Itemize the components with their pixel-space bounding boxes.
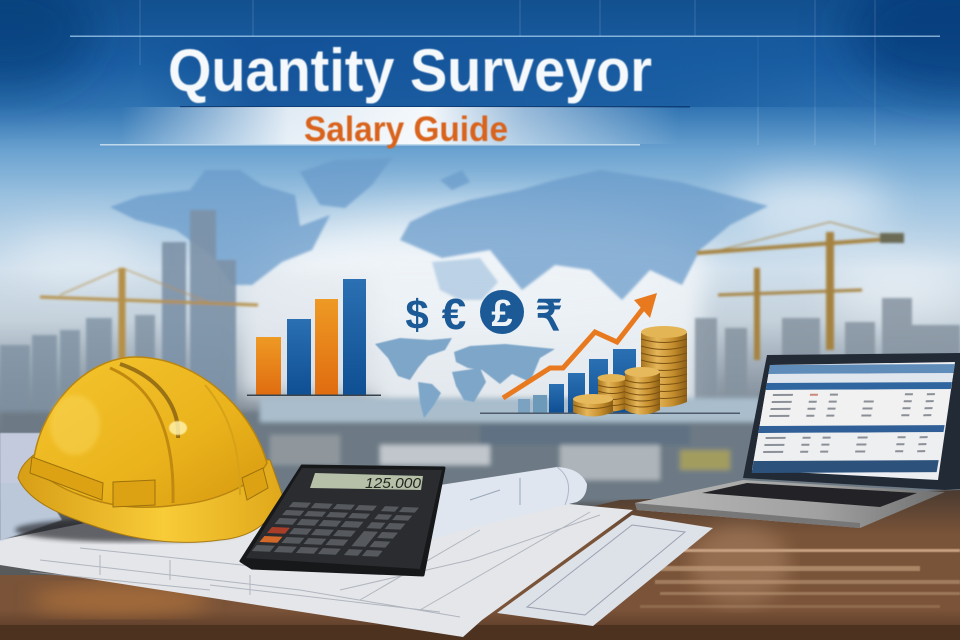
icon: pound coin: £	[491, 293, 513, 335]
bar chart	[247, 279, 381, 396]
display	[310, 473, 423, 492]
subtitle band	[100, 107, 680, 149]
spreadsheet on screen	[752, 364, 955, 473]
right rolled blueprint	[428, 467, 587, 540]
display: 125.000	[365, 475, 422, 492]
skyline left with crane	[0, 210, 258, 415]
strap tabs	[30, 457, 268, 507]
dome ridge	[110, 364, 240, 503]
coin stacks	[573, 326, 687, 416]
currency symbols: $	[405, 291, 429, 338]
clouds	[10, 177, 960, 320]
brim	[18, 452, 283, 542]
mid-ground city haze	[0, 398, 960, 502]
wooden desk	[0, 490, 960, 640]
keyboard	[702, 483, 917, 507]
currency symbols	[405, 290, 562, 339]
keypad	[252, 502, 419, 557]
third stack	[598, 374, 627, 412]
laptop	[635, 353, 960, 528]
lower sheet	[497, 515, 713, 626]
small world map	[375, 338, 555, 418]
second stack	[624, 367, 660, 414]
title: Quantity Surveyor	[168, 37, 652, 104]
title banner	[100, 37, 900, 149]
blueprints	[0, 433, 713, 637]
skyline right with cranes	[695, 222, 960, 415]
dome	[33, 357, 267, 507]
highlights	[50, 395, 100, 455]
screen frame	[743, 353, 960, 490]
large sheet	[0, 490, 633, 637]
left rolled blueprint	[0, 433, 62, 541]
large world map	[110, 158, 768, 300]
panel: central pale backdrop	[240, 262, 700, 412]
front stack	[573, 394, 613, 416]
screen	[752, 362, 955, 480]
tall stack	[641, 326, 687, 407]
icon: pound coin	[480, 290, 524, 335]
currency symbols: €	[442, 290, 466, 339]
hard hat	[15, 357, 283, 542]
calculator	[241, 466, 444, 575]
growth chart with arrow	[480, 293, 740, 414]
subtitle band: Salary Guide	[304, 110, 508, 149]
currency symbols: ₹	[536, 292, 562, 339]
laptop base	[635, 480, 945, 528]
